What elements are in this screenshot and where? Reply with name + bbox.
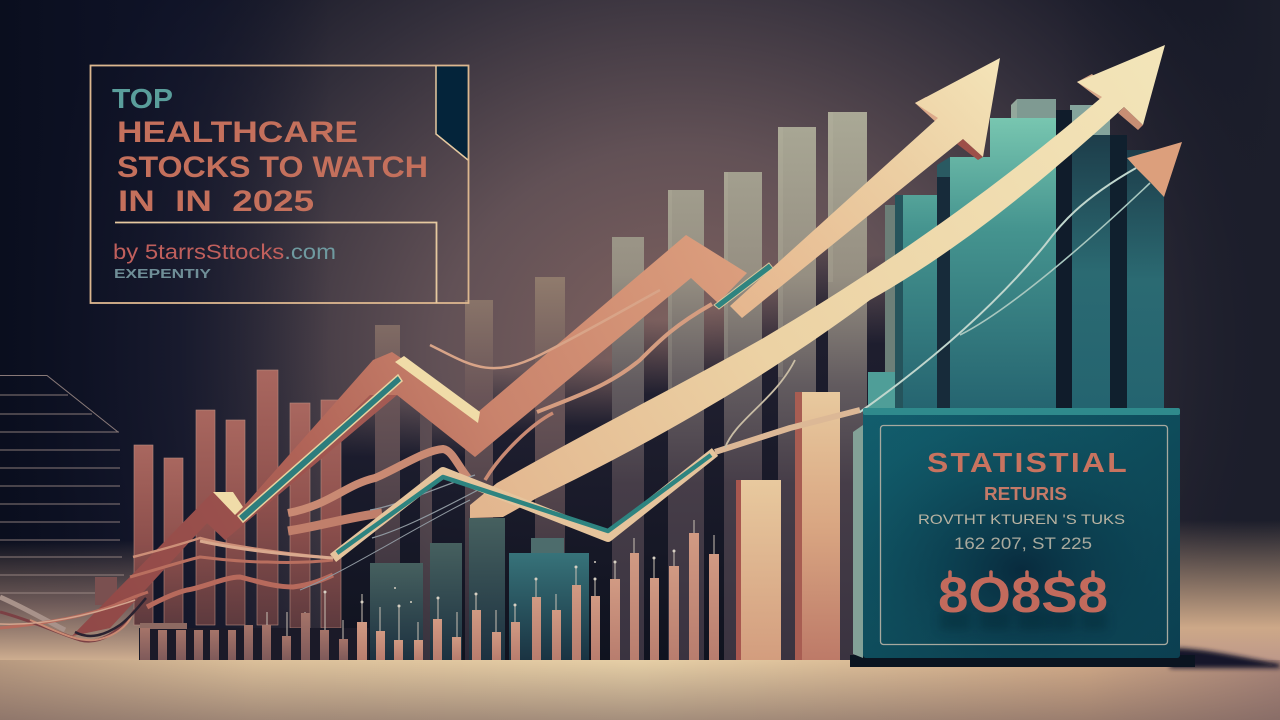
large cream bars [736, 392, 840, 660]
teal inset on upper arrow [714, 263, 773, 309]
arrow: small salmon arrow with thin lines [725, 142, 1182, 448]
teal bar chart, right [868, 99, 1164, 412]
byline: by 5tarrsSttocks .com [113, 241, 336, 264]
card figures: 162 207, ST 225 [954, 534, 1092, 553]
card heading: STATISTIAL [927, 447, 1129, 478]
teal inset strip on zigzag [238, 375, 402, 522]
floor [0, 648, 1280, 720]
teal and cream thin zigzag line [200, 410, 860, 558]
panel: title frame [90, 66, 468, 303]
cream facet strips [213, 356, 480, 515]
left red bar chart [95, 370, 341, 628]
title: IN IN 2025 [118, 185, 314, 218]
arrow: large curved cream arrow [470, 45, 1165, 518]
title: TOP [112, 83, 173, 114]
arrow: upper cream arrow [714, 58, 1000, 318]
left grid lines with diagonal [0, 376, 124, 593]
byline tag: EXEPENTIY [114, 266, 211, 281]
thin salmon ribbons [0, 290, 712, 641]
panel: statistical returns card [853, 408, 1180, 658]
title: HEALTHCARE [117, 116, 358, 149]
card text line: ROVTHT KTUREN 'S TUKS [918, 511, 1125, 527]
teal lower bar cluster [370, 518, 589, 660]
title: STOCKS TO WATCH [117, 151, 428, 184]
dark gaps between rear columns [340, 230, 895, 660]
inner card border [880, 426, 1168, 644]
rear bar chart: fading columns [340, 112, 895, 660]
title [112, 83, 428, 218]
zigzag salmon arrow, left and centre [72, 235, 747, 636]
card subheading: RETURIS [984, 484, 1067, 504]
frame corner tab [436, 66, 468, 160]
small candlestick bars with stems [139, 520, 719, 660]
card large figures: 8O8S8 [938, 567, 1108, 623]
